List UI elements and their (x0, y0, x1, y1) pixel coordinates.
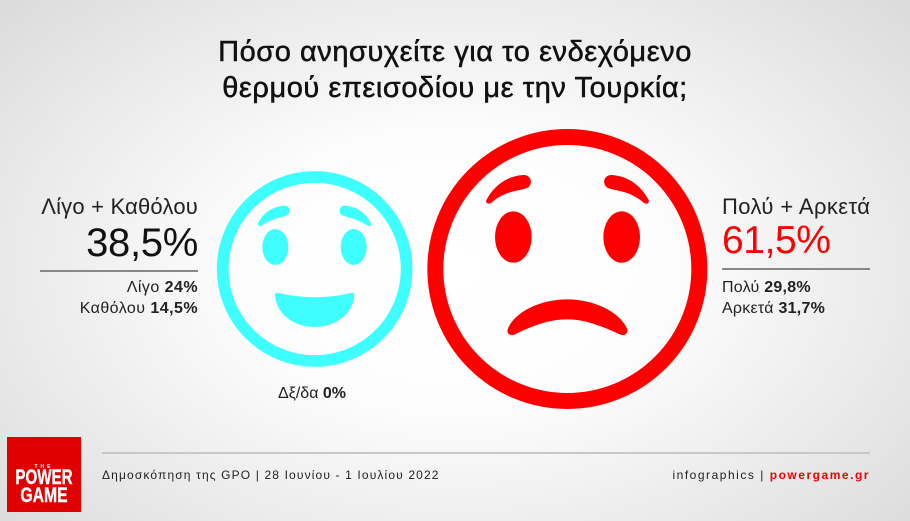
label: Πολύ + Αρκετά: Πολύ + Αρκετά (722, 194, 870, 219)
breakdown: high concern: Αρκετά 31,7% (722, 300, 825, 317)
panel: low concern figures (40, 194, 198, 317)
logo main word: game: GAME (20, 484, 68, 507)
footer rule (102, 452, 870, 454)
title: Πόσο ανησυχείτε για το ενδεχόμενο (218, 36, 692, 68)
logo small word: THE (34, 464, 54, 470)
panel: high concern figures (722, 194, 870, 317)
breakdown: high concern: Πολύ 29,8% (722, 279, 811, 296)
breakdown: low concern: Καθόλου 14,5% (80, 300, 198, 317)
footer credit: infographics | powergame.gr (672, 468, 870, 482)
breakdown: low concern: Λίγο 24% (127, 279, 198, 296)
value: 38,5%: 38,5% (86, 221, 198, 265)
title (218, 36, 692, 104)
logo: The Power Game (7, 437, 81, 512)
icon: smiling face (216, 171, 412, 367)
divider line (722, 268, 870, 270)
no answer note: Δξ/δα 0% (278, 385, 346, 402)
divider line (40, 270, 198, 272)
icon: worried face (427, 129, 708, 409)
value: 61,5%: 61,5% (722, 219, 831, 262)
logo main word: power: POWER (15, 466, 73, 489)
title: θερμού επεισοδίου με την Τουρκία; (222, 72, 688, 104)
breakdown: low concern (80, 279, 198, 317)
source text: Δημοσκόπηση της GPO | 28 Ιουνίου - 1 Ιουλίου 2022 (102, 468, 440, 482)
breakdown: high concern (722, 279, 825, 317)
label: Λίγο + Καθόλου: Λίγο + Καθόλου (41, 194, 198, 219)
